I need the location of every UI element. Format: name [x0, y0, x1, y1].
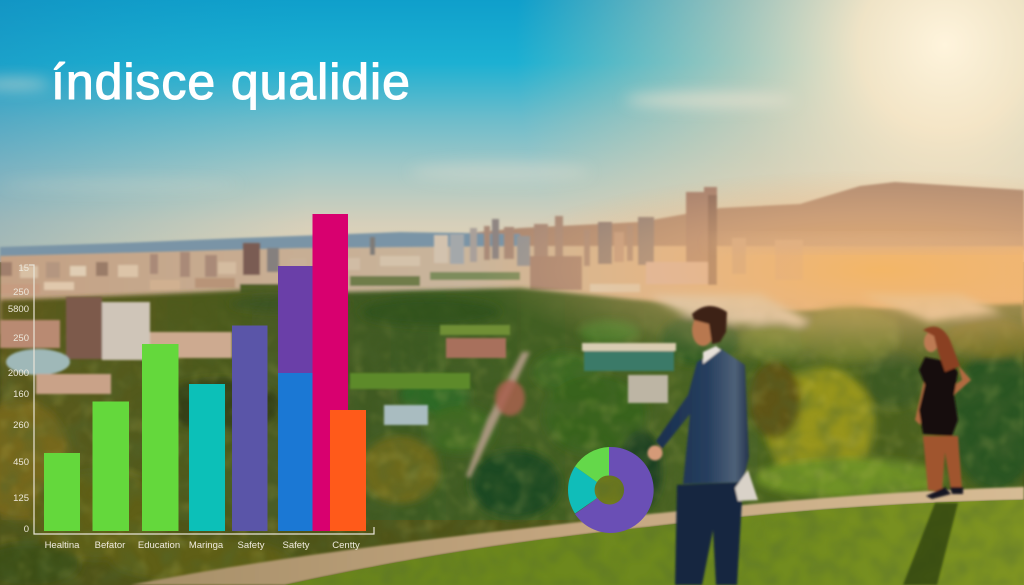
background: warm sunset haze — [480, 170, 1024, 370]
donut chart — [568, 447, 654, 533]
y axis labels: 250 — [13, 333, 29, 344]
y axis labels: 125 — [13, 493, 29, 504]
x axis labels: Safety — [283, 540, 310, 551]
background: grass — [280, 495, 1024, 585]
bar: Healtina — [44, 453, 80, 531]
title: índisce qualidie — [51, 54, 411, 110]
x axis labels: Befator — [95, 540, 125, 551]
background: sky — [0, 0, 1024, 300]
background: walking path — [130, 487, 1024, 585]
person: woman in black dress — [915, 327, 971, 499]
bar: Befator — [92, 402, 129, 531]
bar: Education — [142, 344, 178, 531]
x axis labels: Safety — [238, 540, 265, 551]
y axis labels: 2000 — [8, 368, 29, 379]
background: distant mountains — [0, 182, 1024, 262]
y axis labels: 160 — [13, 389, 29, 400]
y axis labels: 260 — [13, 420, 29, 431]
x axis labels — [45, 540, 360, 551]
background: city — [0, 187, 1024, 334]
chart axes — [29, 265, 374, 534]
shadow of woman on grass — [903, 503, 958, 585]
x axis labels: Healtina — [45, 540, 80, 551]
bar: Safety — [232, 326, 268, 531]
y axis labels: 5800 — [8, 304, 29, 315]
bar: Safety stacked — [278, 266, 313, 531]
bar: Centty — [330, 410, 366, 531]
x axis labels: Maringa — [189, 540, 224, 551]
y axis labels: 250 — [13, 287, 29, 298]
y axis labels: 0 — [24, 524, 29, 535]
bar: Maringa — [189, 384, 225, 531]
y axis labels — [8, 263, 29, 535]
bar chart — [8, 214, 374, 551]
person: man in suit — [648, 306, 758, 585]
bar: pink — [312, 214, 348, 531]
y axis labels: 15 — [18, 263, 29, 274]
x axis labels: Centty — [332, 540, 360, 551]
background: trees — [0, 288, 1024, 585]
y axis labels: 450 — [13, 457, 29, 468]
x axis labels: Education — [138, 540, 180, 551]
